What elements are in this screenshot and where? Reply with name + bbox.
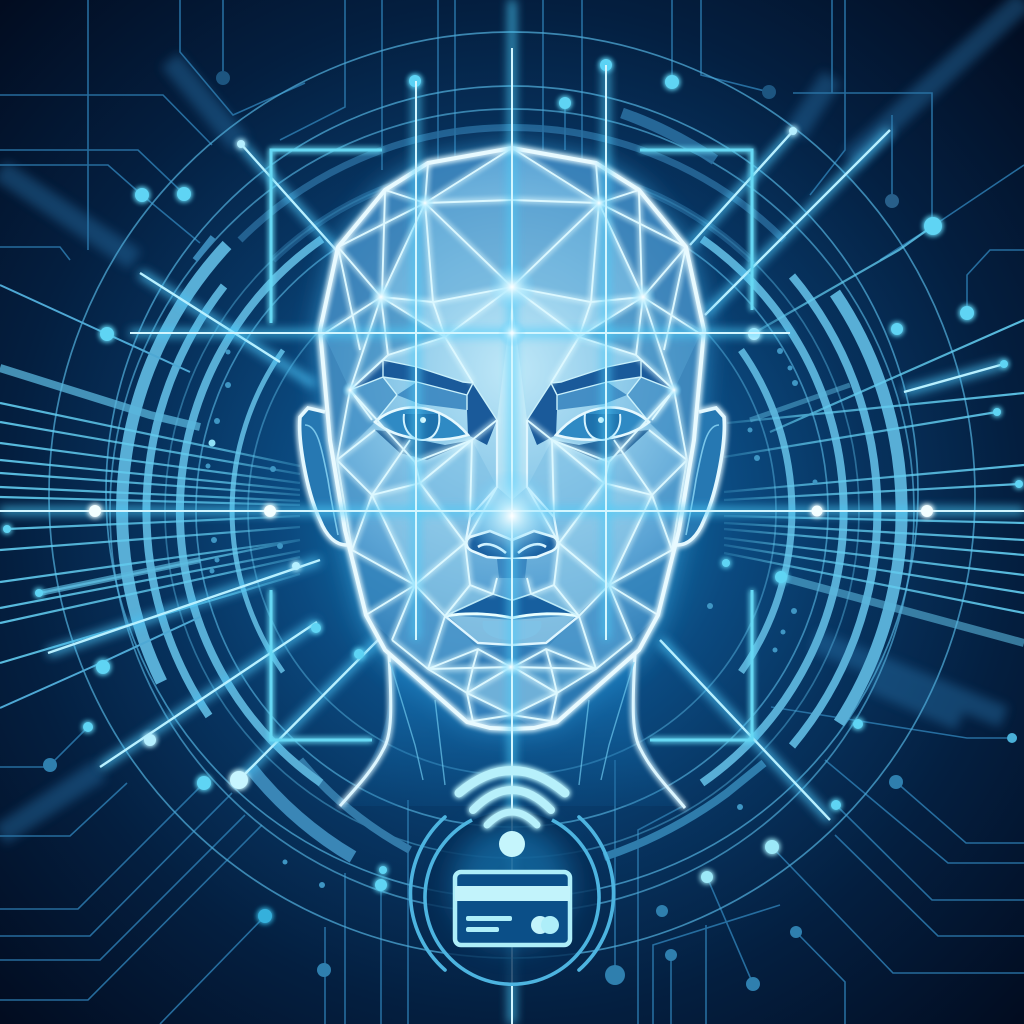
icon: contactless dot (499, 831, 525, 857)
left radial rays (0, 403, 300, 663)
icon outer brackets (410, 817, 614, 970)
corner brackets (271, 150, 752, 740)
bright beams (48, 130, 1004, 820)
wide ray bands (0, 285, 1024, 708)
left half of face (300, 148, 512, 785)
icon backdrop (425, 811, 599, 985)
icon: contactless waves (459, 770, 565, 825)
head glow (320, 148, 704, 729)
face base (320, 148, 704, 729)
right half of face (512, 148, 724, 785)
right radial rays (724, 226, 1024, 613)
neck fill (340, 655, 685, 806)
bright beams glow (48, 130, 1004, 820)
icon center glow (452, 825, 572, 945)
payment icon (410, 770, 614, 985)
bright arc bands (122, 239, 902, 783)
small dots (206, 348, 818, 888)
neck outlines (340, 655, 685, 808)
scan node highlights (89, 505, 933, 517)
icon: credit card (455, 872, 570, 945)
light flares (342, 194, 682, 677)
face outline (320, 148, 704, 729)
icon ring (425, 820, 599, 984)
dim arc bands (195, 113, 784, 857)
